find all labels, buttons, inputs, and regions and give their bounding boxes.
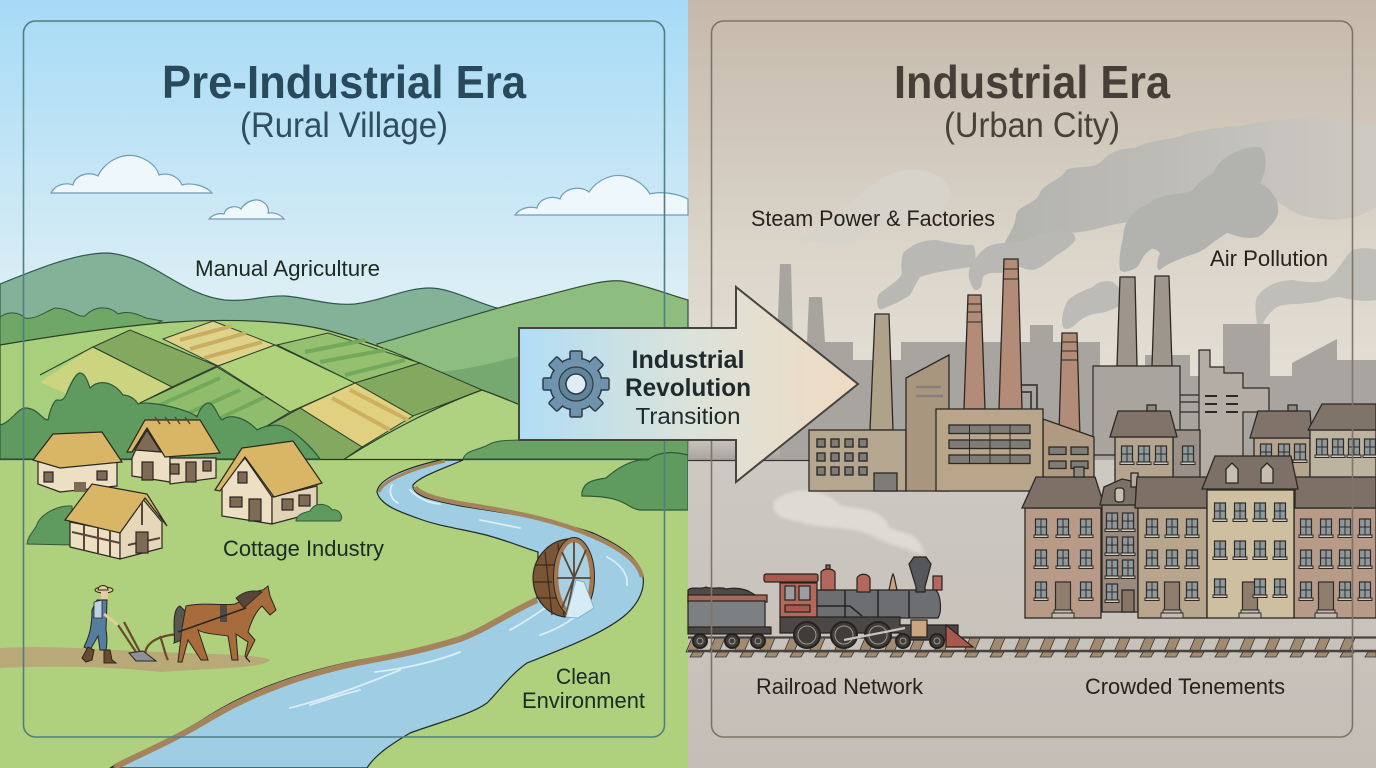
bush band under the arrow [463,440,688,459]
tread slats [534,543,564,617]
title: pre-industrial: Pre-Industrial Era [162,56,526,108]
horizon line [0,458,688,460]
right bank [415,487,642,577]
driving wheels [693,622,944,648]
pre-industrial landscape [0,155,688,768]
upper left bank [379,461,445,492]
bushes on the right [582,453,688,510]
cottage 3 [215,441,322,524]
tenement 5 [1294,477,1376,618]
icon: gear [543,351,609,417]
side rod [844,628,905,640]
panel frame: pre-industrial [24,21,664,737]
background: pre-industrial sky [0,0,688,320]
label: steam power and factories: Steam Power & Factories [751,206,995,231]
smoke plumes [800,118,1376,329]
factory windows [817,439,867,475]
ground [688,460,1376,768]
tree line on hills [0,308,162,350]
river [110,460,643,768]
factory buildings [809,355,1094,491]
lower left bank [115,600,537,767]
label: manual agriculture: Manual Agriculture [195,256,380,281]
forest behind cottages [0,373,320,459]
tenement row [1022,456,1376,618]
cottage 4 [65,484,167,559]
lower right meadow hill [343,390,560,460]
small bush by cottage 3 [296,504,342,521]
industrial city [686,118,1376,768]
back row houses [1110,404,1376,487]
clouds [51,155,688,219]
back buildings [1093,350,1269,480]
plume stack 4 [1062,281,1127,329]
field furrows [160,326,408,430]
arrow label: Industrial [632,346,744,374]
background: industrial sky [688,0,1376,460]
farmer body [84,600,107,650]
ploughed soil strip [0,647,270,672]
label: crowded tenements: Crowded Tenements [1085,674,1285,699]
big plume [1003,118,1376,252]
label: clean environment: Clean [556,664,611,689]
coal tender [688,587,771,634]
plume far right [1256,248,1376,324]
wheel rim outline [554,538,594,616]
wheel rim [556,540,592,614]
water [110,460,643,768]
field patches [40,321,482,460]
arrow label line 3: Transition [636,403,740,429]
bush by cottage 4 [27,506,72,545]
far mountains [0,253,540,400]
label: cottage industry: Cottage Industry [223,536,384,561]
domes and stack [821,557,942,592]
arrow label line 2: Revolution [625,374,751,402]
horse [174,586,276,662]
wheel spokes [697,626,940,644]
plough [118,622,205,660]
factory stacks [870,259,1080,438]
meadow ground [0,459,688,768]
subtitle: rural village: (Rural Village) [240,106,448,145]
cultivated field hill [0,320,530,470]
railroad tracks [686,638,1376,657]
right pair plume [1119,147,1278,272]
cottage 2 [127,417,220,484]
cab [764,574,818,617]
boiler [817,590,940,618]
title: industrial: Industrial Era [894,56,1170,108]
farmer with plough [82,586,205,663]
tenement 2 [1100,473,1138,612]
subtitle: urban city: (Urban City) [944,106,1120,145]
distant skyline [777,264,1376,460]
plume stack 2 [969,231,1075,290]
horizon line [688,460,810,462]
tread [533,539,590,617]
ripples [290,485,627,708]
haze near ground [688,420,1376,460]
plume stack 1 [877,240,976,309]
water wheel [533,538,594,618]
right hill lower shade [430,329,688,470]
boiler bands [817,590,909,618]
label: clean environment: Environment [522,688,645,713]
faint plume behind label [800,170,950,245]
steam from locomotive [773,490,925,555]
panel frame: industrial [712,21,1352,737]
cow catcher [946,625,973,647]
water spill [566,580,594,618]
tenement 1 [1022,467,1105,618]
label: railroad network: Railroad Network [756,674,924,699]
steam locomotive [688,557,973,648]
chassis [780,617,958,640]
back chimneys [1117,276,1172,366]
tenement 4 [1202,456,1298,618]
label: air pollution: Air Pollution [1210,246,1328,271]
cottage 1 [33,432,122,492]
tenement 3 [1135,477,1207,618]
transition arrow [519,287,858,482]
spokes [557,542,591,612]
arrow shape [519,287,858,482]
right hill [377,281,688,470]
